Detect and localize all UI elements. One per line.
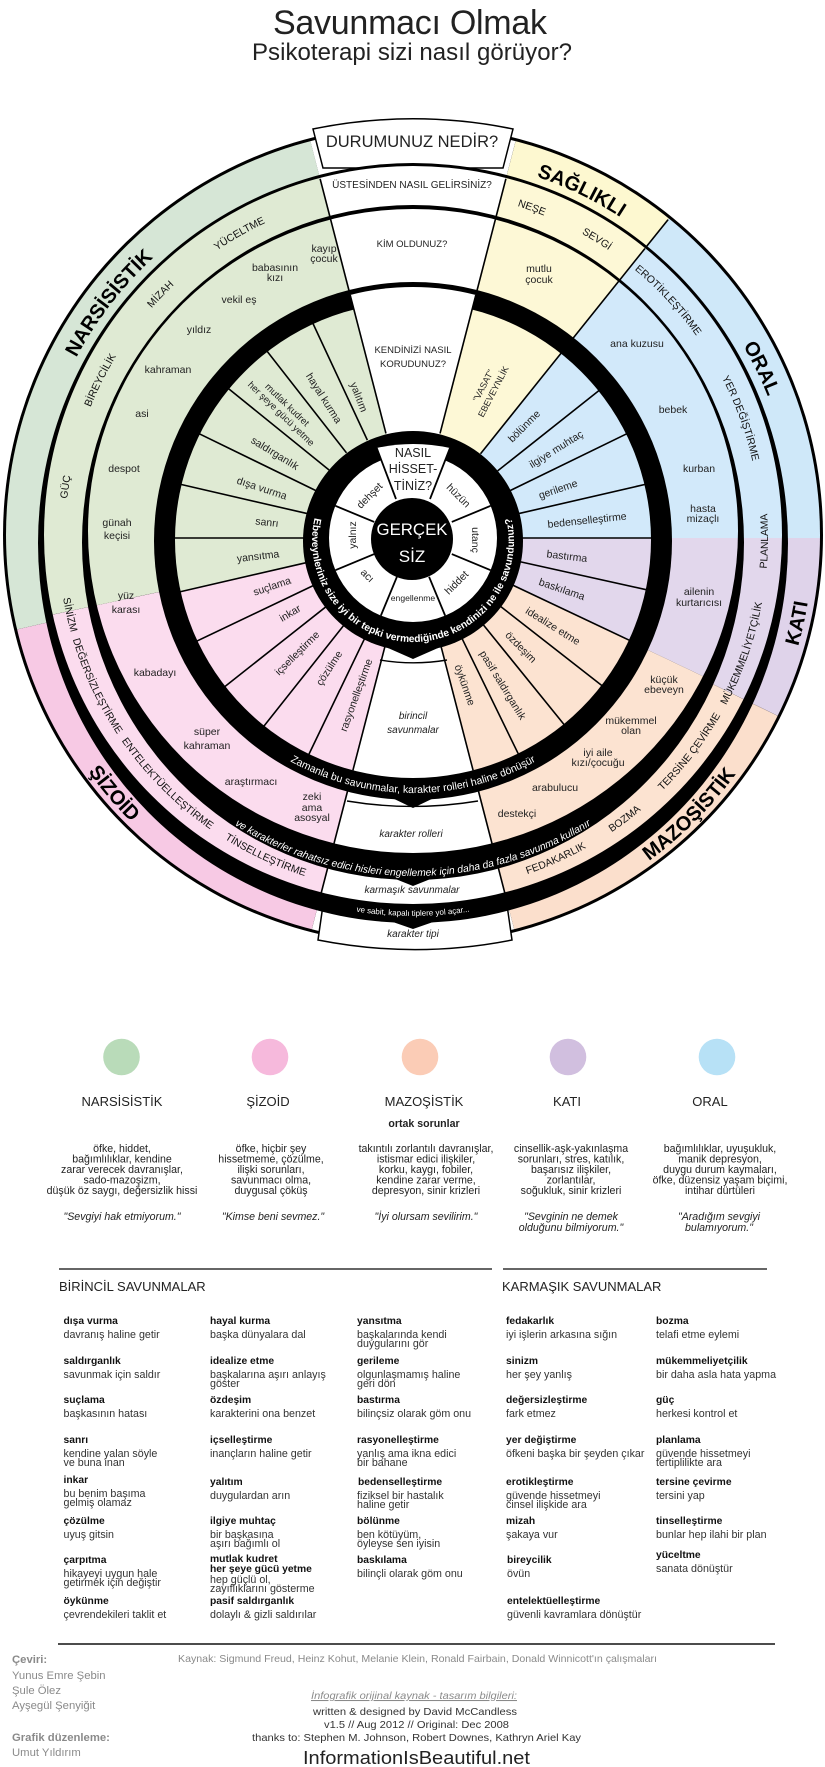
question: nasıl hissettiniz: HİSSET- xyxy=(389,462,437,476)
curved text: ve karakterler: ve karakterler rahatsız edici hisleri engellemek için daha da fazla savunma kullanır xyxy=(236,820,590,878)
primary defenses column 1: saldırganlık xyxy=(64,1356,121,1367)
character role labels: günah xyxy=(102,517,132,529)
complex defense labels: PLANLAMA xyxy=(760,514,768,568)
primary defense sector labels: yansıtma xyxy=(236,548,280,565)
complex defenses column 1: her şey yanlış xyxy=(506,1369,572,1381)
complex defenses column 2: herkesi kontrol et xyxy=(656,1408,737,1420)
character role labels: küçük xyxy=(650,674,678,686)
primary defenses column 2: idealize etme xyxy=(210,1356,274,1367)
primary defense sector labels: dışa vurma xyxy=(235,475,288,503)
character role labels: çocuk xyxy=(310,253,338,265)
character role labels: babasının xyxy=(252,262,298,274)
character role labels: karası xyxy=(112,604,140,616)
complex defense labels: BİREYCİLİK xyxy=(84,353,116,406)
character role labels: asosyal xyxy=(294,812,330,824)
legend: oral: öfke, düzensiz yaşam biçimi, xyxy=(653,1174,787,1186)
bottom box labels: savunmalar xyxy=(387,725,440,736)
legend: katı: cinsellik-aşk-yakınlaşma xyxy=(514,1143,628,1155)
primary defenses column 1: dışa vurma xyxy=(64,1316,118,1327)
complex defenses column 1: yer değiştirme xyxy=(506,1435,577,1446)
legend: oral: duygu durum kaymaları, xyxy=(663,1164,777,1176)
primary defense sector labels: içselleştirme xyxy=(273,629,322,678)
primary defenses column 2: göster xyxy=(210,1378,240,1390)
character type labels: ORAL xyxy=(746,342,778,396)
center circle xyxy=(371,498,453,580)
complex defenses column 1: şakaya vur xyxy=(506,1529,558,1541)
legend: oral xyxy=(653,1039,787,1234)
curved text: ve sabit: ve sabit, kapalı tiplere yol açar... xyxy=(356,908,469,918)
primary defenses column 2 xyxy=(210,1316,326,1621)
original credits: v1.5 // Aug 2012 // Original: Dec 2008 xyxy=(324,1719,509,1731)
primary defenses column 2: yalıtım xyxy=(210,1477,243,1488)
primary defense sector labels: hayal kurma xyxy=(303,371,344,426)
primary defense sector labels: rasyonelleştirme xyxy=(338,657,375,733)
complex defense labels: ENTELEKTÜELLEŞTİRME xyxy=(122,737,214,830)
primary defenses column 1: davranış haline getir xyxy=(64,1329,160,1341)
primary defenses column 3: baskılama xyxy=(357,1555,407,1566)
primary defense sector labels: bedenselleştirme xyxy=(547,511,627,531)
primary defenses column 3: haline getir xyxy=(357,1499,410,1511)
question: nasıl hissettiniz: TİNİZ? xyxy=(394,479,432,493)
character type labels: SAĞLIKLI xyxy=(538,165,627,216)
complex defenses column 2: sanata dönüştür xyxy=(656,1563,733,1575)
character role labels: despot xyxy=(108,463,140,475)
character type labels xyxy=(64,165,808,860)
primary defense sector labels: pasif saldırganlık xyxy=(477,649,529,723)
complex defenses column 1: öfkeni başka bir şeyden çıkar xyxy=(506,1448,645,1460)
translators credits: Ayşegül Şenyiğit xyxy=(12,1700,96,1712)
complex defenses column 2: yüceltme xyxy=(656,1550,701,1561)
primary defenses column 1: sanrı xyxy=(64,1435,88,1446)
character role labels: keçisi xyxy=(104,530,130,542)
circular diagram xyxy=(3,118,823,950)
legend: mazoşistik: "İyi olursam sevilirim." xyxy=(375,1211,479,1223)
legend: oral: manik depresyon, xyxy=(678,1154,762,1166)
character role labels: kayıp xyxy=(311,243,337,255)
legend: katı: başarısız ilişkiler, xyxy=(531,1164,611,1176)
primary defenses column 1: inkar xyxy=(64,1475,88,1486)
character role labels: ebeveyn xyxy=(644,684,684,696)
primary defenses column 3: bedenselleştirme xyxy=(358,1477,442,1488)
primary defenses column 1: ve buna inan xyxy=(64,1457,125,1469)
complex defenses column 1: bireycilik xyxy=(507,1555,552,1566)
inner black ring xyxy=(303,431,523,651)
character type labels: NARSİSİSTİK xyxy=(64,248,154,356)
character role labels: asi xyxy=(135,408,149,420)
primary defenses column 3: bölünme xyxy=(357,1516,400,1527)
complex defense labels: MİZAH xyxy=(146,280,174,308)
legend: mazoşistik: kendine zarar verme, xyxy=(376,1174,476,1186)
second ring: complex defenses xyxy=(111,179,715,897)
heading: karmaşık savunmalar: KARMAŞIK SAVUNMALAR xyxy=(502,1279,661,1294)
primary defense sector labels: çözülme xyxy=(314,649,345,688)
legend: mazoşistik: ortak sorunlar xyxy=(388,1118,460,1130)
primary defenses column 3 xyxy=(357,1316,471,1580)
question: nasıl hissettiniz: NASIL xyxy=(395,446,431,460)
complex defenses column 1: güvende hissetmeyi xyxy=(506,1490,600,1502)
complex defense labels: NEŞE xyxy=(518,200,546,216)
primary defenses column 3: yansıtma xyxy=(357,1316,402,1327)
bottom tab: karakter tipi xyxy=(318,905,512,949)
center questions: DURUMUNUZ NEDİR? xyxy=(326,132,498,151)
primary defenses column 2: dolaylı & gizli saldırılar xyxy=(210,1609,317,1621)
character role labels: vekil eş xyxy=(221,294,257,306)
character type labels: ŞİZOİD xyxy=(88,766,138,819)
primary defense sector labels: bölünme xyxy=(506,408,543,445)
complex defenses column 1: cinsel ilişkide ara xyxy=(506,1499,587,1511)
legend: şizoid: ilişki sorunları, xyxy=(237,1164,305,1176)
primary defenses column 1: çevrendekileri taklit et xyxy=(64,1609,166,1621)
primary defense sector labels: EBEVEYNLİK xyxy=(476,364,511,419)
character role labels: hasta xyxy=(690,503,716,515)
complex defenses column 2: planlama xyxy=(656,1435,701,1446)
complex defenses column 1: erotikleştirme xyxy=(506,1477,574,1488)
bottom box labels: karakter tipi xyxy=(387,929,440,940)
primary defenses column 1: kendine yalan söyle xyxy=(64,1448,157,1460)
character role labels: çocuk xyxy=(525,274,553,286)
complex defenses column 1: entelektüelleştirme xyxy=(507,1596,601,1607)
center questions: ÜSTESİNDEN NASIL GELİRSİNİZ? xyxy=(332,178,492,191)
feelings labels: utanç xyxy=(469,527,481,553)
primary defenses column 1: çözülme xyxy=(64,1516,105,1527)
complex defense labels: SEVGİ xyxy=(582,228,613,250)
arrows xyxy=(388,648,438,929)
subtitle: Psikoterapi sizi nasıl görüyor? xyxy=(252,39,572,66)
complex defenses column 2: mükemmeliyetçilik xyxy=(656,1356,748,1367)
top tab: durumunuz nedir xyxy=(313,119,513,168)
primary defenses column 3: duygularını gör xyxy=(357,1338,429,1350)
primary defense sector labels: suçlama xyxy=(252,575,293,599)
primary defenses column 2: inançların haline getir xyxy=(210,1448,312,1460)
complex defenses column 2 xyxy=(656,1316,776,1575)
complex defenses column 1 xyxy=(506,1316,645,1621)
legend: mazoşistik: depresyon, sinir krizleri xyxy=(372,1185,480,1197)
primary defenses column 1: başkasının hatası xyxy=(64,1408,147,1420)
character type labels: MAZOŞİSTİK xyxy=(642,766,736,860)
character role labels: süper xyxy=(194,726,221,738)
primary defense sector labels: özdeşim xyxy=(502,629,539,666)
legend: oral: ORAL xyxy=(692,1094,728,1109)
ring 2 border xyxy=(38,163,788,923)
original credits xyxy=(252,1690,582,1767)
feelings labels: yalnız xyxy=(347,521,359,549)
legend: narsisistik: zarar verecek davranışlar, xyxy=(61,1164,183,1176)
complex defenses column 2: bozma xyxy=(656,1316,689,1327)
translators credits: Grafik düzenleme: xyxy=(12,1732,110,1744)
legend: katı: soğukluk, sinir krizleri xyxy=(521,1185,621,1197)
primary defense sector labels: baskılama xyxy=(537,576,587,603)
complex defenses column 2: tertiplilikte ara xyxy=(656,1457,722,1469)
translators credits xyxy=(12,1654,110,1759)
primary defenses column 3: bilinçli olarak göm onu xyxy=(357,1568,463,1580)
primary defense sector labels: sanrı xyxy=(255,515,279,530)
legend: narsisistik: öfke, hiddet, xyxy=(93,1143,151,1155)
legend: mazoşistik: korku, kaygı, fobiler, xyxy=(379,1164,473,1176)
primary defenses column 2: bir başkasına xyxy=(210,1529,274,1541)
legend: katı: sorunları, stres, katılık, xyxy=(518,1154,624,1166)
primary defense sector labels: idealize etme xyxy=(523,605,582,648)
legend: şizoid: duygusal çöküş xyxy=(234,1185,308,1197)
complex defenses column 1: iyi işlerin arkasına sığın xyxy=(506,1329,617,1341)
bottom box labels: birincil xyxy=(399,711,428,722)
primary defenses column 3: fiziksel bir hastalık xyxy=(357,1490,444,1502)
character role labels: arabulucu xyxy=(532,782,578,794)
complex defenses column 1: övün xyxy=(507,1568,530,1580)
complex defense labels: YÜCELTME xyxy=(213,216,265,249)
complex defenses column 1: güvenli kavramlara dönüştür xyxy=(507,1609,642,1621)
translators credits: Çeviri: xyxy=(12,1654,47,1666)
original credits: İnfografik orijinal kaynak - tasarım bilgileri: xyxy=(311,1690,517,1702)
center questions: KENDİNİZİ NASIL xyxy=(374,345,452,356)
primary defenses column 1 xyxy=(64,1316,166,1621)
complex defenses column 2: tersine çevirme xyxy=(656,1477,732,1488)
original credits: thanks to: Stephen M. Johnson, Robert Downes, Kathryn Ariel Kay xyxy=(252,1732,582,1744)
legend: mazoşistik: istismar edici ilişkiler, xyxy=(377,1154,475,1166)
feelings labels: dehşet xyxy=(354,480,385,511)
primary defenses column 2: her şeye gücü yetme xyxy=(210,1564,312,1575)
legend: mazoşistik: MAZOŞİSTİK xyxy=(385,1094,464,1109)
primary defense sector labels: mutlak kudret xyxy=(262,381,311,429)
character role labels: mizaçlı xyxy=(687,513,719,525)
wedge: nasıl hissettiniz xyxy=(377,444,450,499)
primary defense sector labels: her şeye gücü yetme xyxy=(245,380,316,449)
legend xyxy=(47,1039,787,1234)
primary defenses column 2: zayıflıklarını gösterme xyxy=(210,1583,315,1595)
character role labels: kurtarıcısı xyxy=(676,597,722,609)
legend: narsisistik: "Sevgiyi hak etmiyorum." xyxy=(63,1211,182,1223)
legend: şizoid: ŞİZOİD xyxy=(246,1094,290,1109)
primary defense sector labels: inkar xyxy=(278,602,304,625)
complex defenses column 1: fedakarlık xyxy=(506,1316,554,1327)
primary defenses column 2: karakterini ona benzet xyxy=(210,1408,315,1420)
bottom box labels: karakter rolleri xyxy=(379,829,443,840)
primary defense sector labels xyxy=(235,364,627,733)
character role labels: iyi aile xyxy=(583,747,613,759)
character role labels: kahraman xyxy=(184,740,230,752)
primary defense sector labels: yalıtım xyxy=(347,381,370,414)
original credits: written & designed by David McCandless xyxy=(312,1706,517,1718)
character role labels: ailenin xyxy=(684,586,714,598)
primary defense sector labels: "VASAT" xyxy=(471,368,496,403)
complex defenses column 2: bir daha asla hata yapma xyxy=(656,1369,776,1381)
legend: narsisistik: sado-mazoşizm, xyxy=(83,1174,161,1186)
complex defense labels: FEDAKARLIK xyxy=(526,842,586,874)
primary defenses column 2: özdeşim xyxy=(210,1395,251,1406)
primary defenses column 1: gelmiş olamaz xyxy=(64,1497,132,1509)
legend: oral: bulamıyorum." xyxy=(685,1222,754,1234)
feelings labels: hüzün xyxy=(444,482,473,510)
primary defenses column 3: olgunlaşmamış haline xyxy=(357,1369,460,1381)
primary defenses column 2: başkalarına aşırı anlayış xyxy=(210,1369,326,1381)
complex defense labels xyxy=(60,200,768,876)
legend: şizoid xyxy=(218,1039,325,1223)
character role labels: kahraman xyxy=(145,364,192,376)
primary defenses column 1: uyuş gitsin xyxy=(64,1529,114,1541)
legend: şizoid: hissetmeme, çözülme, xyxy=(218,1154,324,1166)
complex defenses column 1: fark etmez xyxy=(506,1408,556,1420)
primary defenses column 3: gerileme xyxy=(357,1356,400,1367)
primary defenses column 1: öykünme xyxy=(64,1596,109,1607)
primary defenses column 3: bir bahane xyxy=(357,1457,408,1469)
curved text: ebeveynleriniz: Ebeveynleriniz size iyi bir tepki vermediğinde kendinizi ne ile savundunuz? xyxy=(310,518,514,644)
source line: Kaynak: Sigmund Freud, Heinz Kohut, Melanie Klein, Ronald Fairbain, Donald Winnicott'ın çalışmaları xyxy=(178,1653,657,1665)
character role labels: mutlu xyxy=(526,263,552,275)
bottom box labels: karmaşık savunmalar xyxy=(364,885,460,896)
center questions: KORUDUNUZ? xyxy=(380,359,446,370)
character role labels xyxy=(102,243,722,824)
primary defense sector labels: gerileme xyxy=(537,477,579,502)
legend: narsisistik: NARSİSİSTİK xyxy=(82,1094,163,1109)
character role labels: yıldız xyxy=(187,324,211,336)
character role labels: kabadayı xyxy=(134,667,176,679)
legend: oral: "Aradığım sevgiyi xyxy=(678,1211,761,1223)
character role labels: bebek xyxy=(659,404,688,416)
complex defense labels: SİNİZM xyxy=(64,598,78,632)
legend: mazoşistik: takıntılı zorlantılı davranışlar, xyxy=(359,1143,493,1155)
complex defense labels: GÜÇ xyxy=(60,475,72,498)
character type labels: KATI xyxy=(785,601,808,646)
curved text: zamanla: Zamanla bu savunmalar, karakter rolleri haline dönüşür xyxy=(290,755,534,794)
primary defenses column 1: bu benim başıma xyxy=(64,1488,146,1500)
primary defenses column 3: bastırma xyxy=(357,1395,400,1406)
character role labels: yüz xyxy=(118,590,134,602)
complex defense labels: TERSİNE ÇEVİRME xyxy=(657,712,720,789)
legend: şizoid: "Kimse beni sevmez." xyxy=(222,1211,325,1223)
complex defenses column 1: mizah xyxy=(506,1516,535,1527)
legend: narsisistik: bağımlılıklar, kendine xyxy=(72,1154,172,1166)
complex defense labels: EROTİKLEŞTİRME xyxy=(635,264,702,336)
complex defenses column 2: tersini yap xyxy=(656,1490,705,1502)
legend: oral: intihar dürtüleri xyxy=(685,1185,755,1197)
primary defenses column 2: başka dünyalara dal xyxy=(210,1329,306,1341)
character role labels: destekçi xyxy=(498,808,536,820)
legend: narsisistik xyxy=(47,1039,197,1223)
complex defenses column 1: sinizm xyxy=(506,1356,538,1367)
primary defenses column 3: geri dön xyxy=(357,1378,396,1390)
feelings labels: hiddet xyxy=(443,568,471,597)
complex defenses column 2: telafi etme eylemi xyxy=(656,1329,739,1341)
box top arcs xyxy=(347,660,478,806)
legend: katı xyxy=(514,1039,628,1234)
primary defenses column 3: öyleyse sen iyisin xyxy=(357,1538,440,1550)
legend: katı: zorlantılar, xyxy=(547,1174,595,1186)
third ring: character roles xyxy=(111,219,715,857)
primary defenses column 2: mutlak kudret xyxy=(210,1554,278,1565)
primary defenses column 3: yanlış ama ikna edici xyxy=(357,1448,456,1460)
primary defenses column 2: hayal kurma xyxy=(210,1316,270,1327)
outer ring: character types xyxy=(3,125,823,945)
character role labels: ama xyxy=(302,802,322,814)
feelings labels: engellenme xyxy=(391,593,435,603)
primary defenses column 2: aşırı bağımlı ol xyxy=(210,1538,280,1550)
center text: gerçek siz: SİZ xyxy=(399,547,425,566)
primary defenses column 1: çarpıtma xyxy=(64,1555,107,1566)
primary defenses column 3: bilinçsiz olarak göm onu xyxy=(357,1408,471,1420)
translators credits: Umut Yıldırım xyxy=(12,1747,81,1759)
primary defenses column 2: duygulardan arın xyxy=(210,1490,290,1502)
title: Savunmacı Olmak xyxy=(273,4,548,42)
center questions xyxy=(326,132,498,370)
primary defense sector labels: ilgiye muhtaç xyxy=(527,428,586,471)
center text: gerçek siz: GERÇEK xyxy=(376,520,448,539)
bottom box labels xyxy=(364,711,460,940)
translators credits: Yunus Emre Şebin xyxy=(12,1670,106,1682)
character role labels: olan xyxy=(621,725,641,737)
translators credits: Şule Ölez xyxy=(12,1685,61,1697)
primary defenses column 2: pasif saldırganlık xyxy=(210,1596,294,1607)
primary defenses column 2: ilgiye muhtaç xyxy=(210,1516,276,1527)
complex defense labels: YER DEĞİŞTİRME xyxy=(723,374,760,461)
heading: birincil savunmalar: BİRİNCİL SAVUNMALAR xyxy=(59,1279,206,1294)
character role labels: kızı/çocuğu xyxy=(571,757,625,769)
primary defenses column 3: rasyonelleştirme xyxy=(357,1435,439,1446)
complex defenses column 2: tinselleştirme xyxy=(656,1516,723,1527)
primary defense sector labels: bastırma xyxy=(546,548,588,565)
feelings labels xyxy=(347,480,481,603)
primary defenses column 3: ben kötüyüm, xyxy=(357,1529,421,1541)
primary defenses column 1: hikayeyi uygun hale xyxy=(64,1568,157,1580)
ring 3 border xyxy=(82,205,744,880)
legend: narsisistik: düşük öz saygı, değersizlik hissi xyxy=(47,1185,197,1197)
character role labels: kurban xyxy=(683,463,715,475)
primary defenses column 1: savunmak için saldır xyxy=(64,1369,161,1381)
top white wedge xyxy=(350,287,476,436)
character role labels: kızı xyxy=(267,272,283,284)
primary defenses column 1: suçlama xyxy=(64,1395,105,1406)
center text: gerçek siz xyxy=(376,520,448,566)
legend: mazoşistik xyxy=(359,1039,493,1223)
primary defense sector labels: saldırganlık xyxy=(249,434,301,473)
character role labels: ana kuzusu xyxy=(610,338,664,350)
primary defenses column 2: hep güçlü ol, xyxy=(210,1574,271,1586)
primary defenses column 1: getirmek için değiştir xyxy=(64,1577,161,1589)
complex defense labels: BOZMA xyxy=(608,806,641,832)
complex defense labels: DEĞERSİZLEŞTİRME xyxy=(73,638,123,734)
character role labels: mükemmel xyxy=(605,715,657,727)
complex defenses column 1: değersizleştirme xyxy=(506,1395,588,1406)
character role labels: araştırmacı xyxy=(225,776,277,788)
complex defense labels: MÜKEMMELİYETÇİLİK xyxy=(720,602,762,704)
feelings ring xyxy=(329,444,497,622)
legend: şizoid: savunmacı olma, xyxy=(231,1174,311,1186)
primary defense sector labels: öykünme xyxy=(452,663,477,707)
legend: oral: bağımlılıklar, uyuşukluk, xyxy=(664,1143,776,1155)
legend: katı: "Sevginin ne demek xyxy=(524,1211,619,1223)
thick black ring xyxy=(154,282,672,800)
complex defenses column 2: bunlar hep ilahi bir plan xyxy=(656,1529,767,1541)
center questions: KİM OLDUNUZ? xyxy=(377,239,447,250)
complex defenses column 2: güç xyxy=(656,1395,675,1406)
legend: katı: KATI xyxy=(553,1094,581,1109)
inner sectors: primary defenses xyxy=(175,287,651,808)
complex defense labels: TİNSELLEŞTİRME xyxy=(227,832,306,876)
legend: katı: olduğunu bilmiyorum." xyxy=(519,1222,624,1234)
feelings labels: acı xyxy=(358,567,376,585)
legend: şizoid: öfke, hiçbir şey xyxy=(236,1143,307,1155)
primary defenses column 2: içselleştirme xyxy=(210,1435,273,1446)
complex defenses column 2: güvende hissetmeyi xyxy=(656,1448,750,1460)
character role labels: zeki xyxy=(303,791,321,803)
question: nasıl hissettiniz xyxy=(389,446,437,493)
primary defenses column 3: başkalarında kendi xyxy=(357,1329,447,1341)
